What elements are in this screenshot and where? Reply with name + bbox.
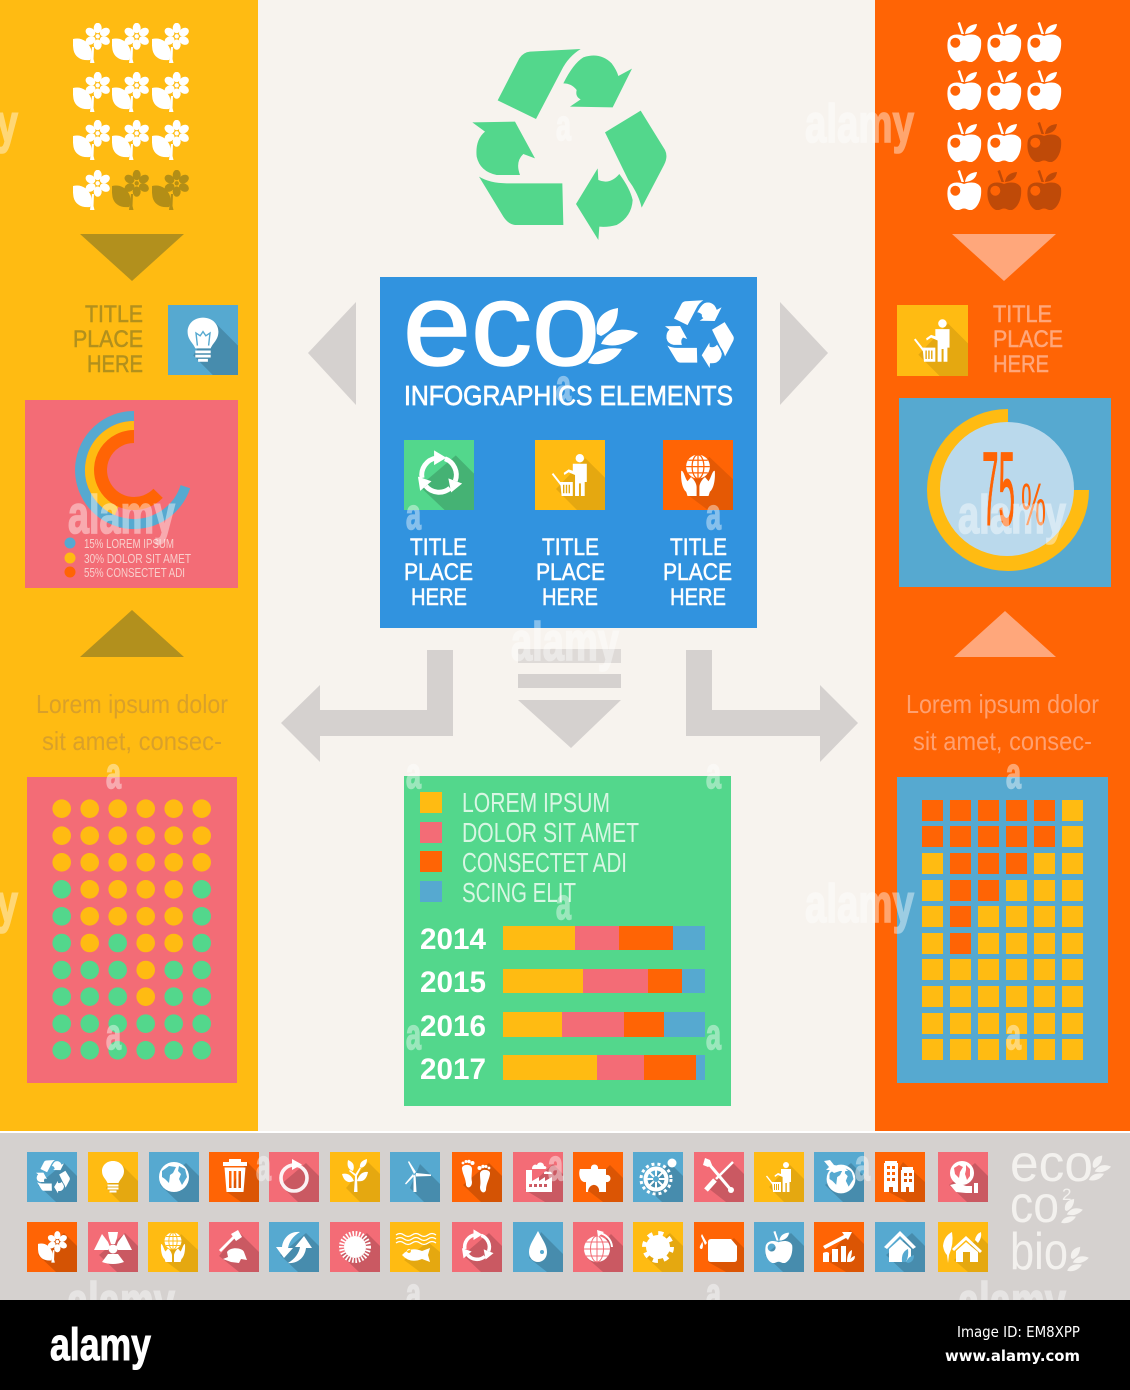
watermarks: a	[556, 361, 571, 410]
bottom icon band	[0, 1131, 1130, 1300]
year labels: 2014	[420, 923, 486, 956]
title columns	[404, 534, 732, 611]
icon: puzzle	[573, 1152, 623, 1202]
icon: person with bin small	[754, 1152, 804, 1202]
icon: house with leaf	[875, 1222, 925, 1272]
icon: recycle	[27, 1152, 77, 1202]
website: www.alamy.com	[945, 1347, 1080, 1365]
left lorem text: Lorem ipsum dolor	[36, 689, 228, 719]
icon: growth chart	[814, 1222, 864, 1272]
icon: fuel canister	[694, 1222, 744, 1272]
icon: axe and stump	[209, 1222, 259, 1272]
icon: swirl arrows	[269, 1222, 319, 1272]
eco co2 bio logos: eco	[1010, 1135, 1093, 1193]
watermarks: a	[1006, 749, 1021, 798]
icon: circular arrows	[404, 440, 474, 510]
bars	[503, 926, 705, 1080]
watermarks: a	[106, 1010, 121, 1059]
right lorem text: Lorem ipsum dolor	[906, 689, 1099, 719]
watermarks: alamy	[958, 1272, 1066, 1332]
right orange column	[875, 0, 1130, 1131]
ring legend: 30% DOLOR SIT AMET	[84, 552, 191, 566]
year labels: 2015	[420, 966, 486, 999]
icon: plane and globe	[814, 1152, 864, 1202]
icon: grid globe	[573, 1222, 623, 1272]
watermarks: a	[556, 880, 571, 929]
watermarks: a	[106, 749, 121, 798]
watermarks: a	[556, 101, 571, 150]
watermarks: alamy	[958, 485, 1066, 545]
watermarks: a	[406, 749, 421, 798]
title columns: TITLE	[670, 534, 727, 561]
eco co2 bio logos: 2	[1062, 1185, 1071, 1204]
icon: globe	[149, 1152, 199, 1202]
icon: circular arrows pink	[452, 1222, 502, 1272]
right title: TITLE	[993, 301, 1052, 328]
watermarks: a	[855, 1141, 870, 1190]
right arrow down	[952, 234, 1056, 281]
percent value	[982, 431, 1046, 548]
panel: eco title box	[380, 259, 757, 628]
watermarks: a	[548, 1141, 563, 1190]
title columns: PLACE	[404, 559, 473, 586]
watermarks: alamy	[67, 1272, 175, 1332]
icon: wrench and screwdriver	[694, 1152, 744, 1202]
ring chart	[80, 416, 185, 524]
icon: hands globe	[148, 1222, 198, 1272]
icon: water drop	[513, 1222, 563, 1272]
panel: pie rings	[25, 400, 238, 588]
left title: HERE	[87, 351, 143, 378]
icon row two	[27, 1222, 988, 1272]
watermarks: alamy	[511, 612, 619, 672]
panel: square matrix	[897, 777, 1108, 1083]
icon: trash can	[209, 1152, 259, 1202]
icon: apple	[754, 1222, 804, 1272]
icon: radiation	[88, 1222, 138, 1272]
title columns: HERE	[411, 584, 467, 611]
year labels: 2017	[420, 1053, 486, 1086]
eco co2 bio logos: co	[1010, 1176, 1059, 1234]
arrow: right triangle	[780, 302, 828, 405]
black footer	[0, 1300, 1130, 1390]
title columns: PLACE	[536, 559, 605, 586]
watermarks: a	[406, 1269, 421, 1318]
icon: plant	[330, 1152, 380, 1202]
arrow: left elbow	[281, 650, 453, 762]
left lorem text: sit amet, consec-	[42, 726, 222, 756]
watermarks: alamy	[805, 874, 914, 934]
watermarks: a	[706, 1010, 721, 1059]
footer logo: alamy	[50, 1319, 151, 1370]
watermarks: a	[406, 1010, 421, 1059]
watermarks: a	[406, 490, 421, 539]
left lorem text	[36, 689, 228, 756]
center cream column	[258, 0, 875, 1131]
left title: PLACE	[73, 326, 143, 353]
icon: recycle small	[665, 300, 734, 368]
icon: footprints	[452, 1152, 502, 1202]
icon row one	[27, 1152, 988, 1202]
title columns: TITLE	[410, 534, 467, 561]
icon: gear and snowflake	[633, 1152, 683, 1202]
icon: factory	[513, 1152, 563, 1202]
left title	[73, 301, 143, 378]
icon: refresh ring	[269, 1152, 319, 1202]
title columns: HERE	[670, 584, 726, 611]
eco logo: eco	[403, 259, 600, 391]
right title: HERE	[993, 351, 1049, 378]
ring legend: 55% CONSECTET ADI	[84, 566, 185, 580]
watermarks: a	[706, 1269, 721, 1318]
watermarks: a	[706, 749, 721, 798]
icon: house with leaves	[938, 1222, 988, 1272]
watermarks: alamy	[805, 94, 914, 154]
panel: dot matrix	[27, 777, 237, 1083]
arrow: right elbow	[686, 650, 858, 762]
icon: gear	[633, 1222, 683, 1272]
bar legend: CONSECTET ADI	[462, 847, 627, 878]
left arrow down	[80, 234, 184, 281]
icon: fish and waves	[390, 1222, 440, 1272]
icon: sun	[330, 1222, 380, 1272]
ring legend: 15% LOREM IPSUM	[84, 537, 174, 551]
apple pictogram grid	[947, 22, 1061, 210]
bar legend	[420, 787, 639, 908]
icon: bulb	[88, 1152, 138, 1202]
percent value: 75	[982, 431, 1015, 548]
watermarks: a	[256, 1141, 271, 1190]
watermarks: a	[1006, 1010, 1021, 1059]
right lorem text: sit amet, consec-	[913, 726, 1092, 756]
icon: flower	[27, 1222, 77, 1272]
title columns: HERE	[542, 584, 598, 611]
icon: person with bin tile	[897, 305, 968, 376]
panel: 75 percent gauge: %	[1021, 471, 1046, 538]
year labels: 2016	[420, 1010, 486, 1043]
icon: large recycle symbol	[472, 49, 666, 240]
right title: PLACE	[993, 326, 1063, 353]
icon: hands holding globe	[663, 440, 733, 510]
left title: TITLE	[85, 301, 143, 328]
flower pictogram grid	[73, 23, 190, 210]
arrow: left triangle	[308, 302, 356, 405]
watermarks: alamy	[68, 485, 175, 545]
right title	[993, 301, 1063, 378]
heading: infographics elements: INFOGRAPHICS ELEMENTS	[404, 380, 733, 411]
eco co2 bio logos	[1010, 1135, 1111, 1281]
ring legend	[64, 537, 191, 580]
icon: wind turbine	[390, 1152, 440, 1202]
left arrow up	[80, 610, 184, 657]
right lorem text	[906, 689, 1099, 756]
bar legend: LOREM IPSUM	[462, 787, 610, 818]
panel: stacked bars	[404, 776, 731, 1106]
watermarks: a	[706, 490, 721, 539]
image id: Image ID: EM8XPP	[957, 1323, 1080, 1341]
arrow: center down	[518, 649, 621, 748]
title columns: TITLE	[542, 534, 599, 561]
year labels	[420, 923, 486, 1086]
right arrow up	[954, 611, 1056, 657]
icon: globe in hand	[938, 1152, 988, 1202]
icon: light bulb	[168, 305, 238, 375]
bar legend: SCING ELIT	[462, 877, 576, 908]
eco co2 bio logos: bio	[1010, 1223, 1068, 1281]
icon: buildings	[875, 1152, 925, 1202]
title columns: PLACE	[663, 559, 732, 586]
left yellow column	[0, 0, 258, 1131]
panel: 75 percent gauge	[899, 398, 1111, 587]
bar legend: DOLOR SIT AMET	[462, 817, 639, 848]
icon: person with bin	[535, 440, 605, 510]
